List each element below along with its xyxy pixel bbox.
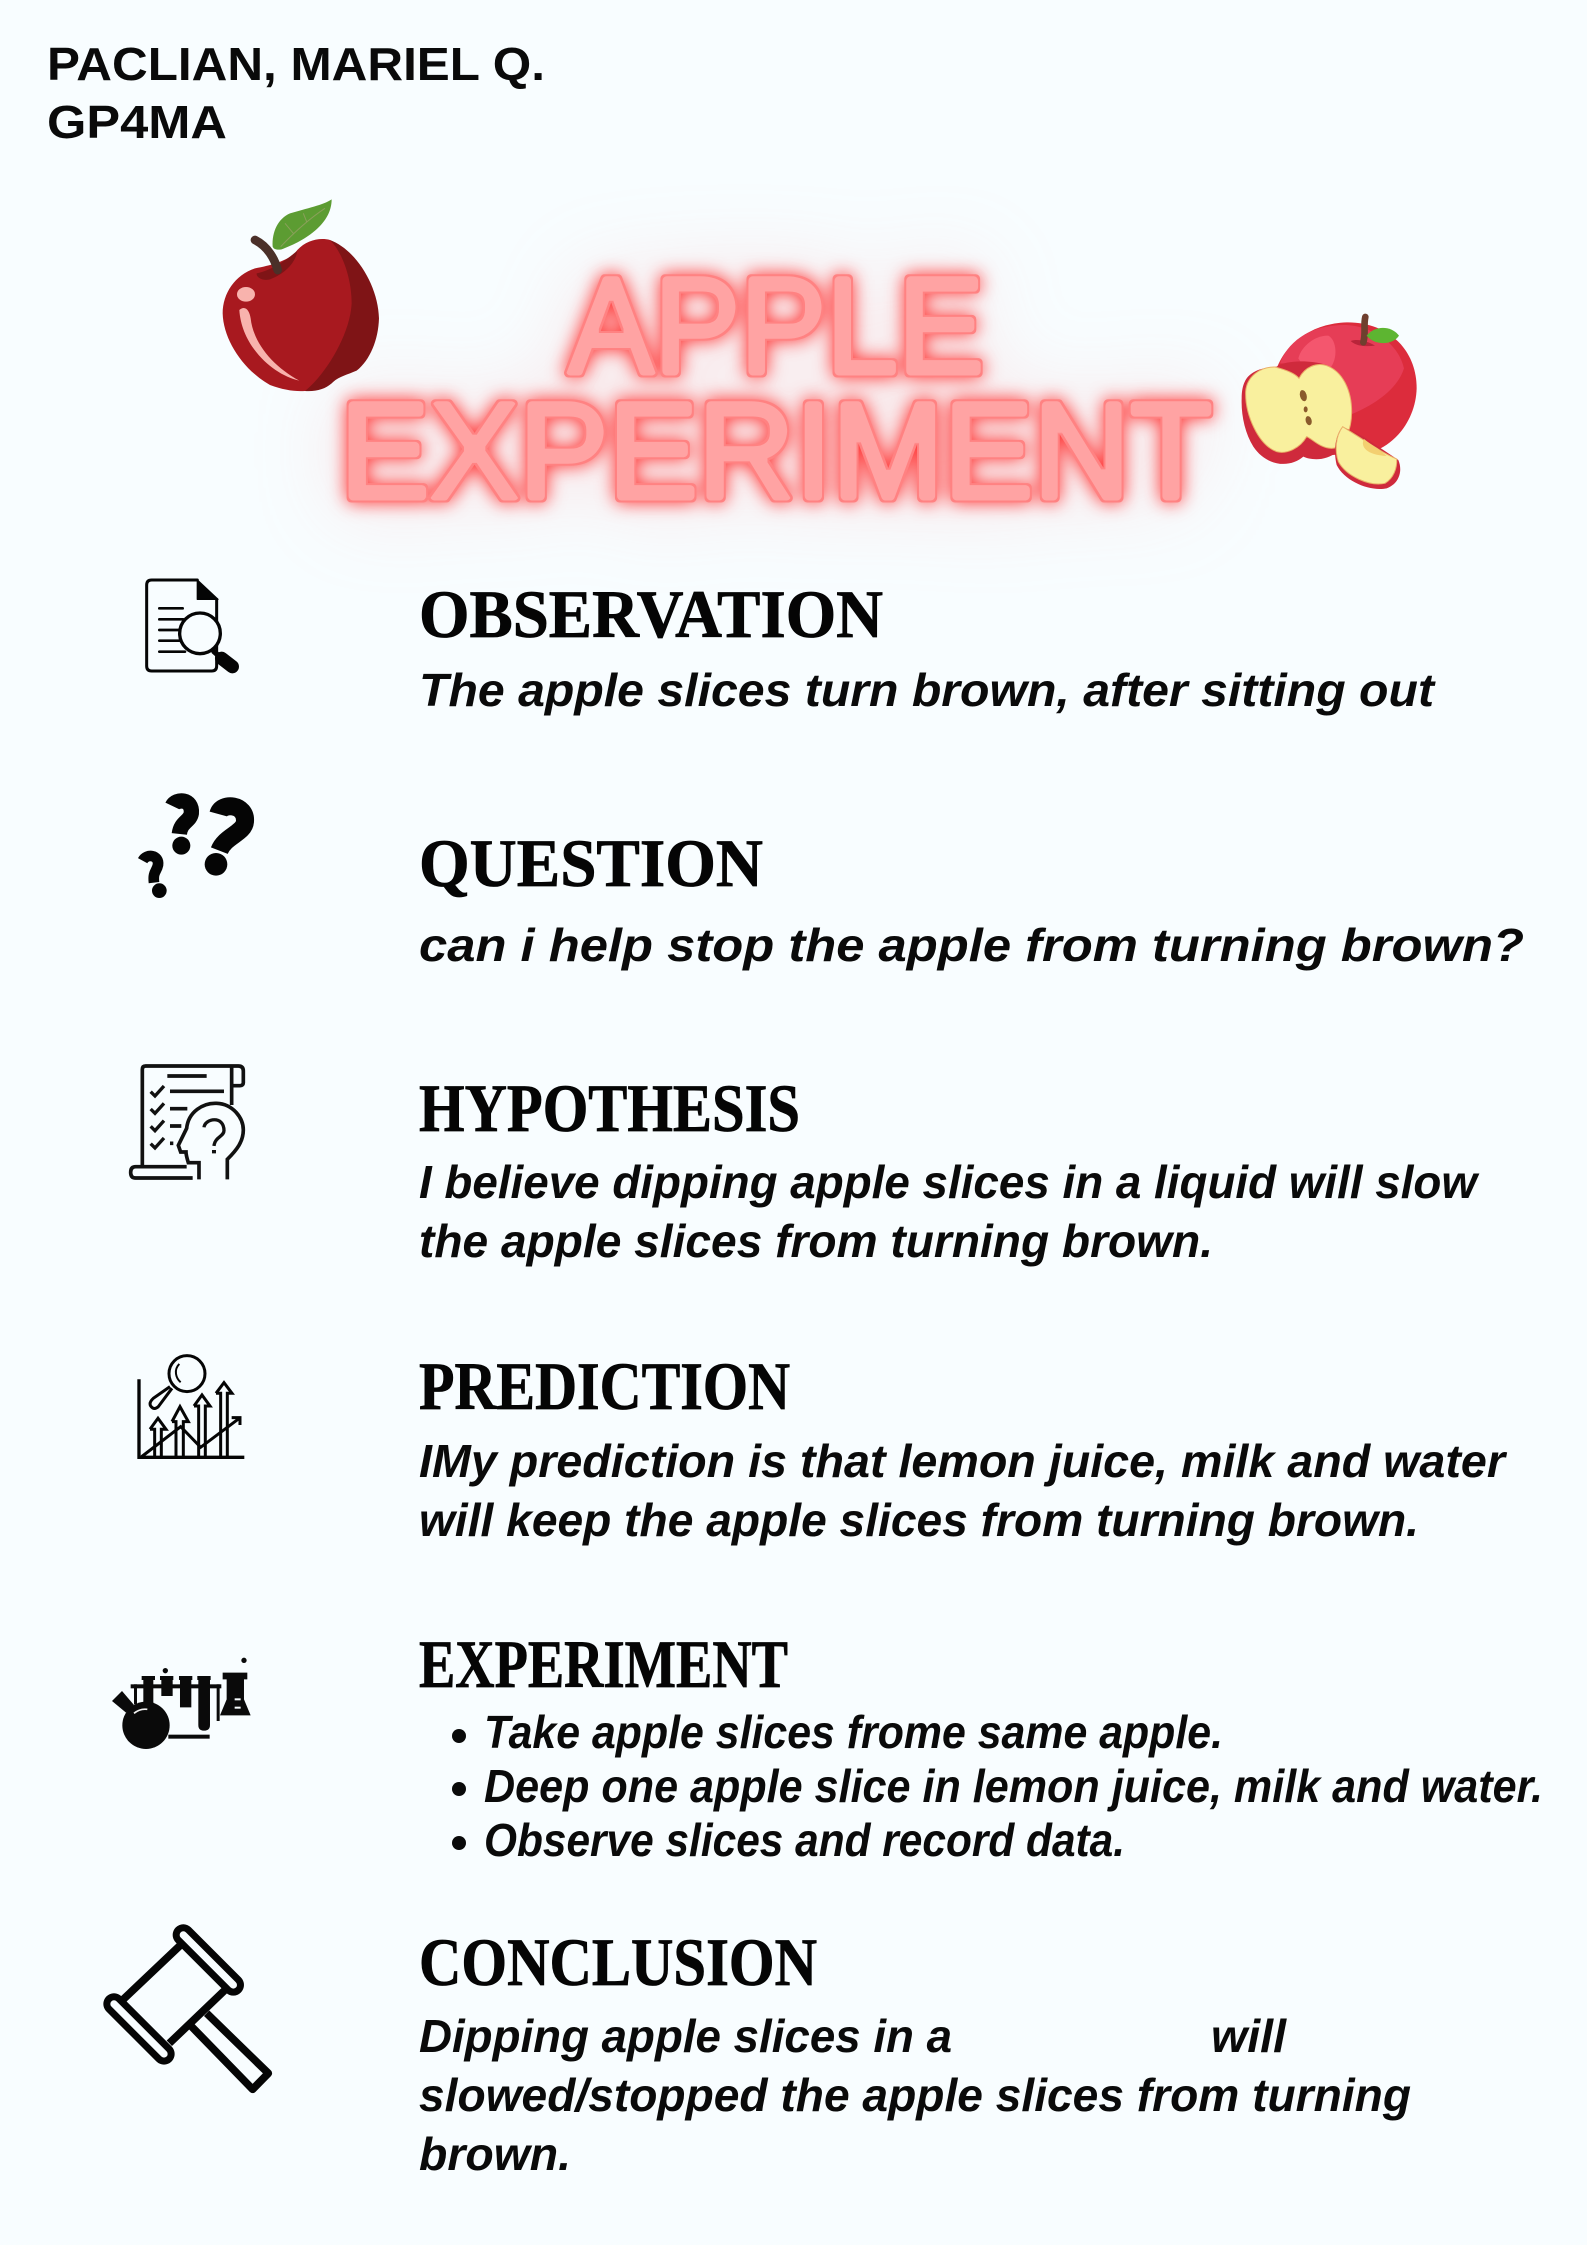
title: Apple Experiment: EXPERIMENT bbox=[340, 375, 1212, 528]
text: experiment steps: Deep one apple slice in lemon juice, milk and water. bbox=[484, 1760, 1543, 1812]
text: observation: The apple slices turn brown, after sitting out bbox=[419, 664, 1436, 716]
icon: lab glassware bbox=[112, 1658, 251, 1749]
text: hypothesis bbox=[419, 1156, 1480, 1267]
text: prediction: IMy prediction is that lemon juice, milk and water bbox=[419, 1435, 1507, 1487]
text: prediction bbox=[419, 1435, 1507, 1546]
text: experiment steps bbox=[452, 1706, 1543, 1866]
title: Apple Experiment: APPLE bbox=[568, 250, 984, 403]
heading: prediction: PREDICTION bbox=[419, 1348, 790, 1424]
icon: question marks bbox=[143, 801, 245, 898]
icon: gavel bbox=[114, 1935, 268, 2089]
text: prediction: will keep the apple slices from turning brown. bbox=[419, 1494, 1419, 1546]
text: conclusion: will bbox=[1211, 2010, 1287, 2062]
heading: hypothesis: HYPOTHESIS bbox=[419, 1070, 800, 1146]
icon: document with magnifier bbox=[147, 580, 232, 671]
header: author name and section: GP4MA bbox=[47, 96, 227, 148]
section: prediction bbox=[139, 1348, 1507, 1546]
heading: observation: OBSERVATION bbox=[419, 576, 883, 652]
section: question bbox=[143, 801, 1524, 971]
text: experiment steps: Observe slices and record data. bbox=[484, 1814, 1125, 1866]
heading: experiment: EXPERIMENT bbox=[419, 1626, 788, 1702]
section: experiment bbox=[112, 1626, 1543, 1866]
text: conclusion: slowed/stopped the apple slices from turning bbox=[419, 2069, 1411, 2121]
heading: conclusion: CONCLUSION bbox=[419, 1924, 817, 2000]
icon: red apple left bbox=[223, 199, 379, 391]
icon: cut red apple right bbox=[1242, 317, 1417, 489]
text: hypothesis: I believe dipping apple slices in a liquid will slow bbox=[419, 1156, 1480, 1208]
text: hypothesis: the apple slices from turning brown. bbox=[419, 1215, 1213, 1267]
section: hypothesis bbox=[131, 1066, 1480, 1267]
text: experiment steps: Take apple slices frome same apple. bbox=[484, 1706, 1223, 1758]
text: conclusion bbox=[419, 2010, 1411, 2180]
text: conclusion: Dipping apple slices in a bbox=[419, 2010, 952, 2062]
text: question: can i help stop the apple from turning brown? bbox=[419, 919, 1524, 971]
section: conclusion bbox=[114, 1924, 1411, 2180]
text: conclusion: brown. bbox=[419, 2128, 571, 2180]
icon: chart with magnifier bbox=[139, 1356, 244, 1457]
icon: checklist scroll with thinking head bbox=[131, 1066, 243, 1179]
header: author name and section bbox=[47, 38, 545, 148]
section: observation bbox=[147, 576, 1436, 716]
title: Apple Experiment bbox=[340, 250, 1212, 528]
heading: question: QUESTION bbox=[419, 825, 763, 901]
header: author name and section: PACLIAN, MARIEL Q. bbox=[47, 38, 545, 90]
